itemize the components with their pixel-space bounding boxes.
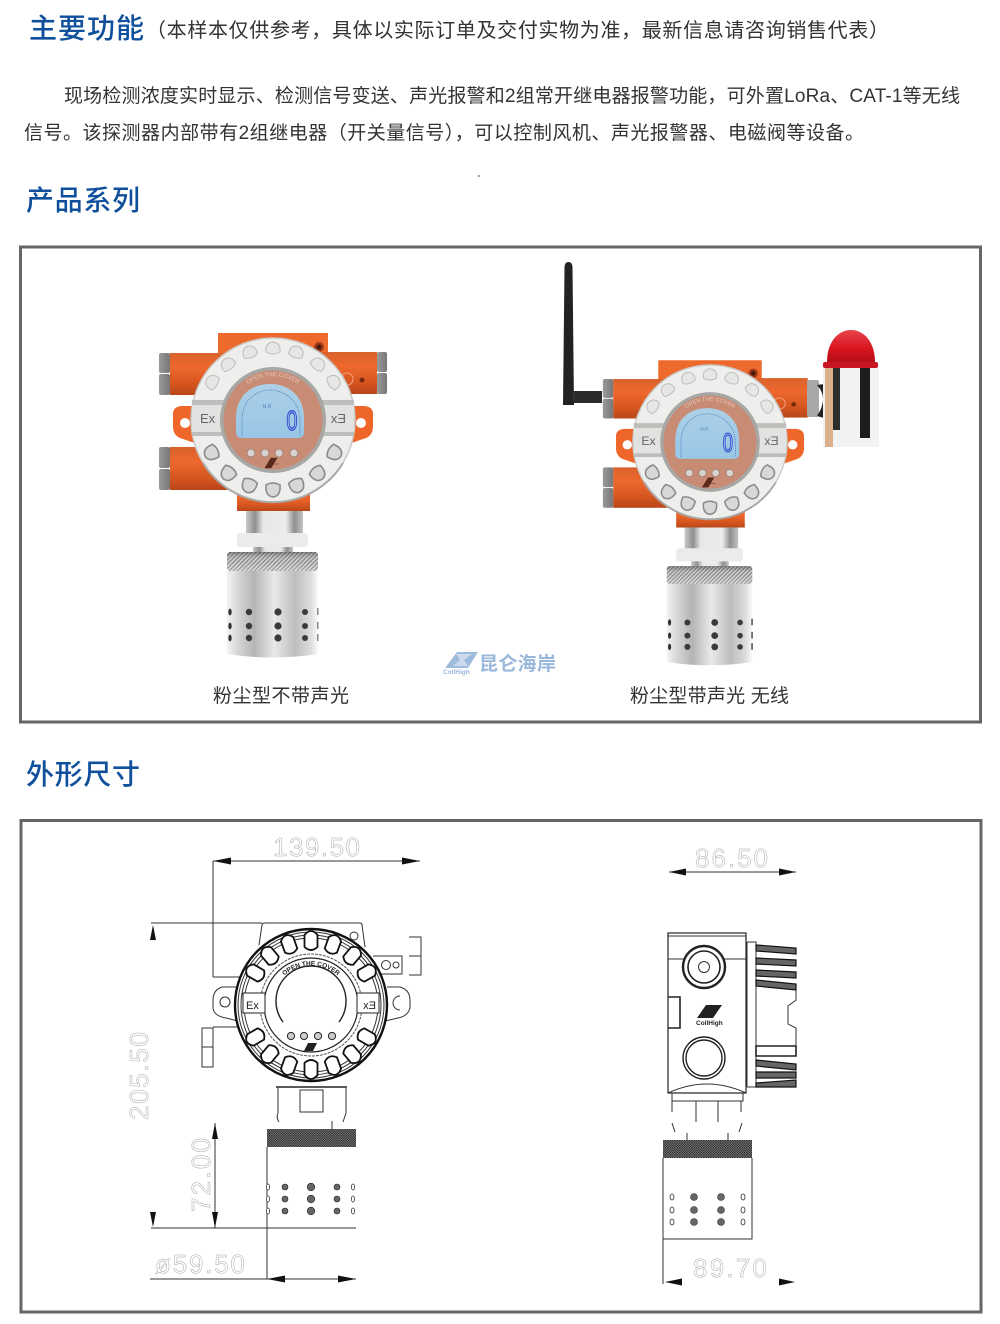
Ex tabs: Ex — [641, 434, 656, 448]
drawing: side view — [663, 843, 796, 1286]
drawing: front view — [124, 832, 422, 1282]
ring outline: Ex — [363, 1000, 376, 1012]
heading: dimensions: 外形尺寸 — [26, 759, 140, 790]
housing side outline: CollHigh — [696, 1020, 723, 1027]
steel adaptor — [685, 528, 738, 551]
heading: main functions: 主要功能 — [29, 13, 144, 44]
orange neck — [237, 490, 310, 511]
LCD screen: N.R — [263, 404, 272, 410]
antenna — [563, 262, 602, 405]
product: dust detector without sound and light — [159, 333, 387, 658]
Ex tabs: Ex — [200, 411, 216, 426]
diameter dimension 59.50 — [150, 1249, 356, 1282]
sensor cap side outline — [663, 1140, 752, 1239]
watermark logo — [443, 652, 556, 676]
brand mark — [702, 478, 716, 487]
Ex tabs — [192, 400, 354, 436]
height dimension 205.50 — [124, 925, 156, 1227]
width dimension 86.50 — [669, 843, 796, 876]
panel: dimensions — [20, 819, 982, 1314]
note: sample disclaimer: （本样本仅供参考，具体以实际订单及交付实物为准，最新信息请咨询销售代表） — [146, 19, 889, 42]
control buttons — [247, 449, 298, 457]
product: dust detector with sound and light, wireless: OPEN THE COVER — [685, 396, 735, 408]
width dimension 86.50: 86.50 — [695, 843, 768, 873]
width dimension 139.50: 139.50 — [273, 832, 360, 862]
LCD screen: 0 — [287, 406, 297, 437]
alarm beacon — [807, 330, 879, 447]
diameter dimension 59.50: ø59.50 — [155, 1249, 245, 1279]
caption: with sound and light, wireless: 粉尘型带声光 无线 — [630, 685, 789, 707]
flange ring — [633, 365, 787, 519]
text block: function description — [24, 85, 960, 144]
Ex tabs: Ex — [764, 434, 779, 448]
sensor cap outline — [266, 1129, 356, 1215]
LCD screen — [675, 408, 739, 459]
control buttons — [686, 469, 734, 477]
width dimension 139.50 — [213, 832, 420, 864]
sensor cap — [667, 566, 753, 665]
LCD screen: N.R — [700, 427, 709, 432]
ring side outline — [747, 942, 796, 1087]
housing top — [658, 360, 762, 423]
neck side outline — [672, 1101, 742, 1140]
width dimension 89.70 — [665, 1253, 795, 1286]
ring outline: OPEN THE COVER — [282, 960, 340, 976]
brand mark — [265, 458, 279, 468]
neck outline — [276, 1087, 347, 1129]
product: dust detector with sound and light, wireless — [602, 360, 808, 666]
flange ring — [191, 338, 355, 502]
display face — [220, 367, 326, 473]
LCD screen: 0 — [723, 427, 733, 457]
text block: function description: 信号。该探测器内部带有2组继电器（开关量信号），可以控制风机、声光报警器、电磁阀等设备。 — [24, 122, 864, 144]
ring outline: Ex — [246, 1000, 259, 1012]
width dimension 89.70: 89.70 — [693, 1253, 767, 1283]
ring outline — [234, 928, 388, 1082]
LCD screen — [236, 384, 304, 438]
panel: product series — [19, 246, 982, 724]
watermark logo: CollHigh — [443, 669, 470, 676]
mounting ears — [616, 429, 644, 466]
housing outline — [202, 923, 421, 1067]
orange neck — [676, 508, 745, 528]
steel adaptor — [246, 511, 303, 536]
sensor cap — [227, 552, 318, 658]
heading: product series: 产品系列 — [26, 185, 140, 216]
housing side outline — [668, 933, 746, 1101]
housing top — [218, 333, 328, 400]
height dimension 205.50: 205.50 — [124, 1032, 154, 1120]
caption: without sound and light: 粉尘型不带声光 — [213, 685, 349, 707]
text block: function description: 现场检测浓度实时显示、检测信号变送、声光报警和2组常开继电器报警功能，可外置LoRa、CAT-1等无线 — [64, 85, 960, 107]
display face — [660, 392, 760, 492]
Ex tabs — [634, 423, 786, 457]
watermark logo: 昆仑海岸 — [479, 652, 556, 675]
Ex tabs: Ex — [330, 411, 346, 426]
height dimension 72.00 — [186, 1123, 218, 1228]
product: dust detector without sound and light: OPEN THE COVER — [246, 372, 300, 384]
height dimension 72.00: 72.00 — [186, 1138, 216, 1212]
mounting ears — [173, 406, 203, 446]
